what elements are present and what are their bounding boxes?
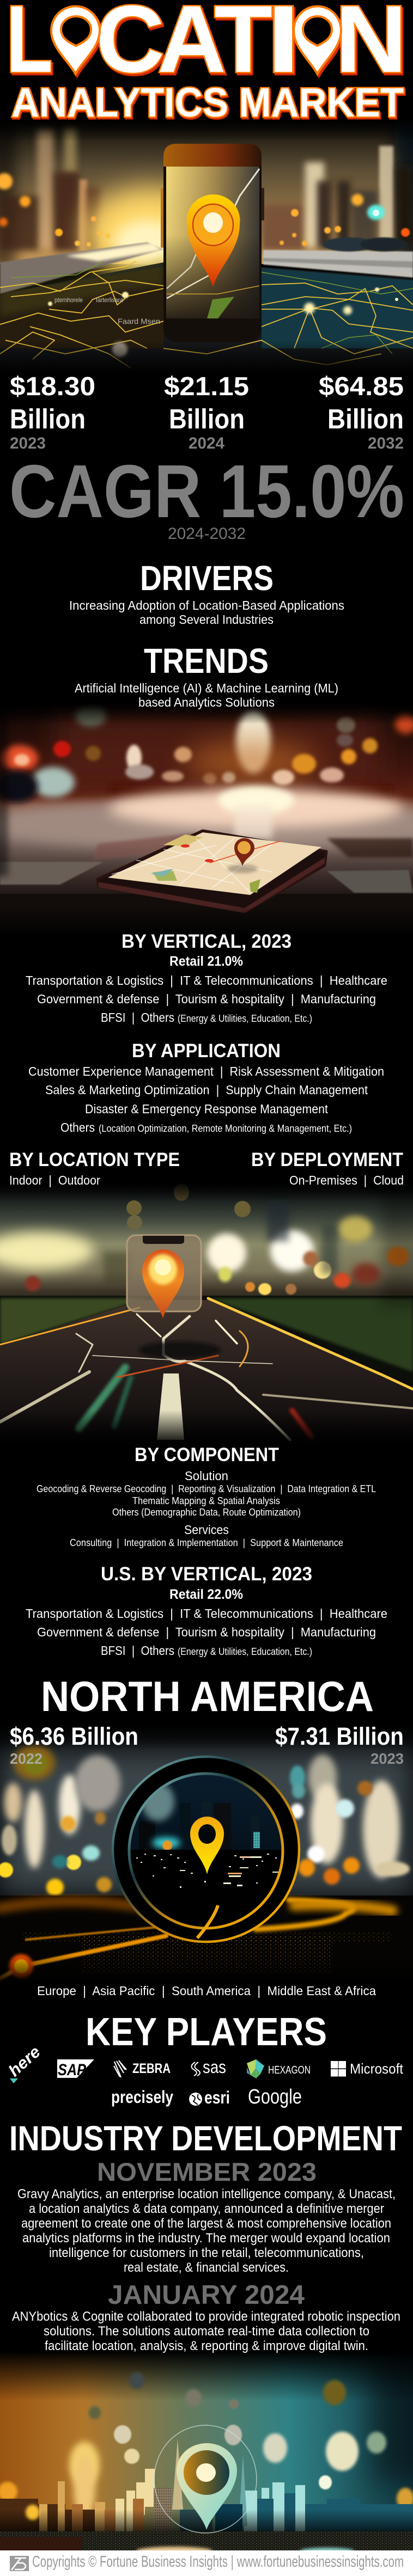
application list: Disaster & Emergency Response Management [85, 1102, 329, 1116]
stat: 2023 market size: $18.30 [10, 372, 95, 401]
skyline [0, 2439, 413, 2537]
heading: North America: NORTH AMERICA [41, 1672, 374, 1720]
development text: January 2024: facilitate location, analysis, & reporting & improve digital twin. [45, 2339, 368, 2353]
stat: North America 2022: 2022 [10, 1750, 42, 1767]
by location type [9, 1149, 180, 1187]
ground and glowing road [0, 1896, 413, 1984]
illustration: pin in a ring over a night city [0, 1723, 413, 1984]
component list: Solution [185, 1469, 228, 1483]
date: November 2023: NOVEMBER 2023 [97, 2157, 317, 2186]
drivers text: Increasing Adoption of Location-Based Applications [69, 598, 344, 612]
road lines [0, 1298, 413, 1440]
logo: Zebra: ZEBRA [132, 2061, 171, 2076]
blurred skyline lights [0, 1183, 409, 1295]
development text: January 2024 [12, 2309, 400, 2353]
application list: Others [60, 1120, 95, 1134]
heading: by application: BY APPLICATION [132, 1040, 281, 1062]
phone frame with pin [127, 1235, 201, 1318]
heading: drivers: DRIVERS [140, 559, 274, 598]
logo: Zebra [114, 2060, 171, 2077]
date: January 2024: JANUARY 2024 [108, 2280, 305, 2310]
other regions: Europe | Asia Pacific | South America | Middle East & Africa [37, 1984, 376, 1998]
map labels [54, 297, 160, 324]
application list [28, 1064, 384, 1134]
illustration: smartphone with map on a city street [0, 702, 413, 936]
stat: 2032 market size [319, 372, 404, 452]
stat: 2024 market size: $21.15 [164, 372, 249, 401]
stat: 2024 market size: 2024 [189, 434, 224, 452]
stat: 2032 market size: $64.85 [319, 372, 404, 401]
component list: Geocoding & Reverse Geocoding | Reporting & Visualization | Data Integration & ETL [37, 1483, 376, 1494]
phone [161, 144, 264, 342]
lit street [0, 800, 413, 850]
development text: November 2023 [17, 2187, 396, 2275]
vertical list: Government & defense | Tourism & hospitality | Manufacturing [37, 992, 376, 1006]
grass and road [0, 1296, 413, 1448]
logo: SAS [191, 2057, 226, 2077]
leading vertical share: Retail 21.0% [169, 954, 243, 969]
map labels: Iarterlisara [96, 296, 123, 304]
stat: 2023 market size: Billion [10, 403, 86, 434]
US vertical list: Government & defense | Tourism & hospitality | Manufacturing [37, 1625, 376, 1639]
leading US vertical share: Retail 22.0% [169, 1587, 243, 1602]
stat: 2023 market size [10, 372, 95, 452]
logo: Hexagon [247, 2059, 311, 2078]
bokeh lights [0, 705, 413, 803]
map ground [0, 262, 413, 373]
logo: Microsoft: Microsoft [350, 2060, 404, 2077]
trends text [75, 681, 338, 709]
icon: gold location pin [190, 1817, 224, 1874]
illustration: phone with glowing pin on a road [0, 1181, 413, 1448]
US vertical list: BFSI | Others [101, 1643, 174, 1658]
by deployment [251, 1149, 404, 1187]
map labels: pternhorele [54, 296, 83, 304]
development text: November 2023: a location analytics & data company, announced a definitive merger [29, 2201, 384, 2216]
logo: SAS: sas [203, 2057, 226, 2077]
logo: here: here [5, 2043, 44, 2080]
component list: Thematic Mapping & Spatial Analysis [132, 1495, 280, 1506]
application list: (Location Optimization, Remote Monitoring & Management, Etc.) [99, 1123, 352, 1134]
icon: dark red pin [234, 838, 254, 866]
icon: glowing pin [142, 1249, 184, 1318]
illustration: pin over a glowing skyline [0, 2352, 413, 2555]
title: Location Analytics Market [6, 0, 407, 125]
map roads [0, 261, 413, 368]
icon: Fortune Business Insights logo [10, 2556, 29, 2571]
title line: LOCATION with pin-shaped O letters: O [65, 24, 78, 42]
development text: January 2024: solutions. The solutions automate real-time data collection to [44, 2324, 369, 2339]
stat: North America 2023: 2023 [371, 1750, 404, 1767]
drivers text [69, 598, 344, 627]
title line: LOCATION with pin-shaped O letters: O [308, 24, 320, 42]
vertical list: (Energy & Utilities, Education, Etc.) [178, 1013, 312, 1024]
logo: Esri: esri [204, 2088, 230, 2107]
US vertical list: (Energy & Utilities, Education, Etc.) [178, 1646, 312, 1657]
phone [98, 831, 326, 913]
development text: November 2023: intelligence for customers in the retail, telecommunications, [49, 2246, 364, 2260]
heading: key players: KEY PLAYERS [86, 2010, 327, 2054]
illustration: phone with location pin over night city map [0, 117, 413, 373]
title line: LOCATION with pin-shaped O letters [6, 0, 407, 93]
trends text: Artificial Intelligence (AI) & Machine Learning (ML) [75, 681, 338, 695]
vertical list: BFSI | Others [101, 1010, 174, 1025]
stat: 2024 market size: Billion [169, 403, 245, 434]
table tiles [0, 862, 104, 885]
vertical list [26, 973, 387, 1025]
US vertical list [26, 1606, 387, 1658]
trends text: based Analytics Solutions [138, 695, 275, 709]
stat: 2023 market size: 2023 [10, 434, 46, 452]
stat: 2024 market size [164, 372, 249, 452]
stat: 2032 market size: Billion [327, 403, 404, 434]
by deployment: BY DEPLOYMENT [251, 1149, 403, 1170]
stat: 2032 market size: 2032 [368, 434, 404, 452]
logo: Google: Google [248, 2086, 302, 2108]
ring with inner city [113, 1757, 299, 1942]
component list: Services [184, 1523, 229, 1537]
logo: Hexagon: HEXAGON [268, 2064, 311, 2076]
blurred city lights [0, 1745, 410, 1896]
bokeh lights [0, 2372, 413, 2520]
heading: trends: TRENDS [144, 641, 269, 680]
by deployment: On-Premises | Cloud [289, 1173, 404, 1187]
CAGR period: 2024-2032 [168, 525, 246, 543]
heading: US by vertical: U.S. BY VERTICAL, 2023 [101, 1563, 312, 1585]
cars [323, 237, 375, 252]
roads [0, 242, 163, 294]
by location type: Indoor | Outdoor [9, 1173, 100, 1187]
logo: SAP: SAP [58, 2061, 87, 2079]
stat: North America 2022: $6.36 Billion [10, 1722, 138, 1750]
application list: Customer Experience Management | Risk Assessment & Mitigation [28, 1064, 384, 1078]
stat: North America 2023 [275, 1722, 404, 1767]
logo: Precisely: precisely [111, 2087, 173, 2107]
street lights [0, 173, 410, 247]
map labels: Faard Msen [118, 317, 160, 326]
icon: orange location pin [186, 194, 240, 287]
component list: Others (Demographic Data, Route Optimization) [112, 1507, 301, 1518]
component list: Consulting | Integration & Implementation | Support & Maintenance [70, 1537, 343, 1548]
application list: Sales & Marketing Optimization | Supply Chain Management [45, 1083, 368, 1097]
location ring and pin [154, 2425, 257, 2533]
logos: key players [5, 2043, 404, 2108]
drivers text: among Several Industries [139, 612, 274, 627]
stat: North America 2022 [10, 1722, 138, 1767]
US vertical list: Transportation & Logistics | IT & Telecommunications | Healthcare [26, 1606, 387, 1621]
logo: Esri [189, 2088, 230, 2107]
development text: November 2023: analytics platforms in the industry. The merger would expand location [22, 2231, 390, 2246]
component list [37, 1469, 376, 1548]
by location type: BY LOCATION TYPE [9, 1149, 180, 1170]
footer bar [0, 2550, 413, 2576]
heading: by vertical: BY VERTICAL, 2023 [122, 931, 291, 952]
vertical list: Transportation & Logistics | IT & Telecommunications | Healthcare [26, 973, 387, 988]
heading: by component: BY COMPONENT [135, 1444, 279, 1465]
development text: November 2023: real estate, & financial services. [124, 2260, 289, 2275]
